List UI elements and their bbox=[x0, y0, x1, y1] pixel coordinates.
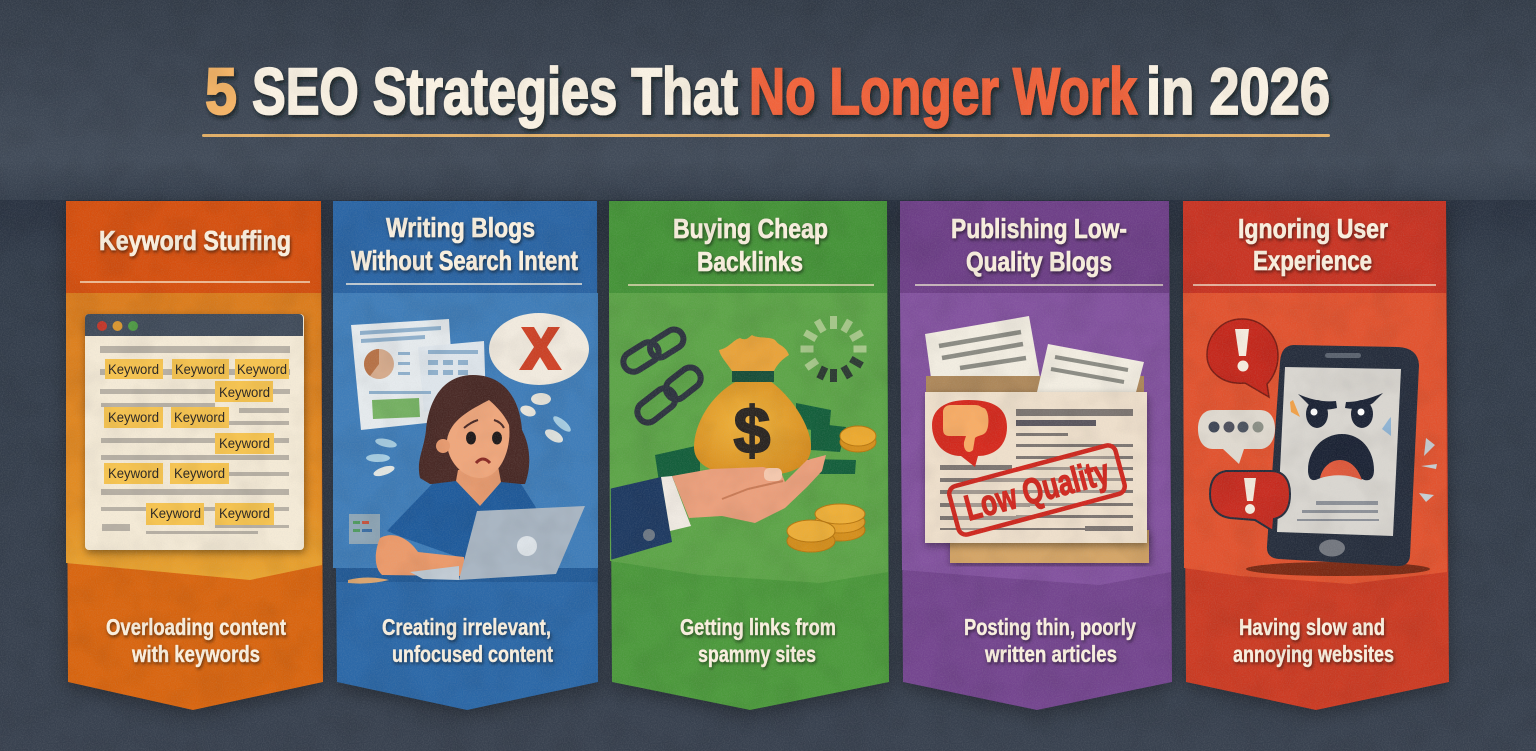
icon: banknotes bbox=[655, 403, 856, 482]
illustration: browser window stuffed with keywords: Keyword bbox=[150, 505, 201, 521]
heading: ignoring user experience: Experience bbox=[1253, 245, 1372, 276]
icon: sticky note bbox=[349, 514, 380, 544]
icon: money bag: $ bbox=[734, 393, 770, 467]
figure: worried woman bbox=[376, 375, 545, 576]
icon: web page documents bbox=[351, 319, 486, 430]
illustration: browser window stuffed with keywords: Keyword bbox=[174, 409, 225, 425]
icon: exclamation bubble top bbox=[1207, 319, 1278, 397]
heading: buying cheap backlinks: Buying Cheap bbox=[673, 213, 828, 244]
panel: buying cheap backlinks bbox=[609, 201, 889, 715]
illustration: browser window stuffed with keywords: Keyword bbox=[108, 465, 159, 481]
icon: laptop bbox=[348, 506, 585, 584]
icon: money bag bbox=[694, 335, 811, 476]
icon: speech bubble with red X bbox=[366, 313, 589, 478]
heading: writing blogs: Writing Blogs bbox=[386, 212, 535, 243]
title: in 2026 bbox=[1146, 54, 1330, 128]
title: 5 bbox=[205, 54, 237, 128]
icon: angry face bbox=[1290, 393, 1391, 521]
illustration: browser window stuffed with keywords: Keyword bbox=[108, 409, 159, 425]
illustration: angry phone bbox=[1198, 319, 1437, 576]
heading: ignoring user experience: Ignoring User bbox=[1238, 213, 1388, 244]
panel: writing blogs without search intent bbox=[333, 201, 598, 715]
description: buying cheap backlinks bbox=[680, 614, 836, 667]
description: writing blogs bbox=[382, 614, 553, 667]
title: No Longer Work bbox=[749, 54, 1137, 128]
description: keyword stuffing: Overloading content bbox=[106, 614, 286, 640]
description: writing blogs: unfocused content bbox=[392, 641, 553, 667]
heading: publishing low-quality blogs: Quality Blogs bbox=[966, 246, 1112, 277]
panel: keyword stuffing bbox=[66, 201, 323, 715]
illustration: low quality document folder bbox=[925, 316, 1149, 563]
illustration: browser window stuffed with keywords: Keyword bbox=[108, 361, 159, 377]
illustration: browser window stuffed with keywords: Keyword bbox=[219, 505, 270, 521]
heading: buying cheap backlinks bbox=[673, 213, 828, 277]
heading: buying cheap backlinks: Backlinks bbox=[697, 246, 803, 277]
stamp: low quality: Low Quality bbox=[960, 451, 1114, 528]
illustration: browser window stuffed with keywords: Keyword bbox=[175, 361, 225, 377]
icon: thumbs down bubble bbox=[932, 400, 1007, 467]
title bbox=[205, 54, 1330, 128]
icon: gold coins bbox=[787, 426, 876, 552]
illustration: browser window stuffed with keywords: Keyword bbox=[219, 435, 270, 451]
description: ignoring user experience bbox=[1233, 614, 1394, 667]
panel: publishing low-quality blogs bbox=[900, 201, 1172, 715]
description: writing blogs: Creating irrelevant, bbox=[382, 614, 551, 640]
heading: ignoring user experience bbox=[1238, 213, 1388, 276]
illustration: browser window stuffed with keywords bbox=[85, 314, 304, 550]
illustration: browser window stuffed with keywords: Keyword bbox=[237, 361, 287, 377]
description: publishing low-quality blogs: Posting thin, poorly bbox=[964, 614, 1136, 640]
stamp: low quality bbox=[947, 444, 1127, 536]
heading: publishing low-quality blogs bbox=[951, 213, 1127, 277]
illustration: browser window stuffed with keywords: Keyword bbox=[174, 465, 225, 481]
heading: publishing low-quality blogs: Publishing Low- bbox=[951, 213, 1127, 244]
description: publishing low-quality blogs bbox=[964, 614, 1136, 667]
icon: exclamation bubble bottom bbox=[1210, 471, 1290, 531]
description: buying cheap backlinks: Getting links from bbox=[680, 614, 836, 640]
icon: typing bubble bbox=[1198, 410, 1275, 464]
panel: ignoring user experience bbox=[1183, 201, 1449, 715]
icon: vibration marks bbox=[1419, 438, 1437, 502]
heading: writing blogs: Without Search Intent bbox=[351, 245, 578, 276]
description: keyword stuffing bbox=[106, 614, 286, 667]
description: ignoring user experience: annoying websites bbox=[1233, 641, 1394, 667]
description: keyword stuffing: with keywords bbox=[131, 641, 260, 667]
title: SEO Strategies That bbox=[252, 54, 738, 128]
icon: broken chain links bbox=[620, 326, 705, 427]
heading: writing blogs bbox=[351, 212, 578, 276]
description: ignoring user experience: Having slow and bbox=[1239, 614, 1385, 640]
illustration: browser window stuffed with keywords: Keyword bbox=[219, 384, 270, 400]
icon: loading spinner bbox=[800, 316, 866, 382]
icon: hand in suit sleeve bbox=[609, 455, 826, 560]
illustration: confused writer at laptop bbox=[333, 313, 598, 584]
description: publishing low-quality blogs: written articles bbox=[984, 641, 1117, 667]
heading: keyword stuffing: Keyword Stuffing bbox=[99, 225, 291, 256]
description: buying cheap backlinks: spammy sites bbox=[698, 641, 816, 667]
